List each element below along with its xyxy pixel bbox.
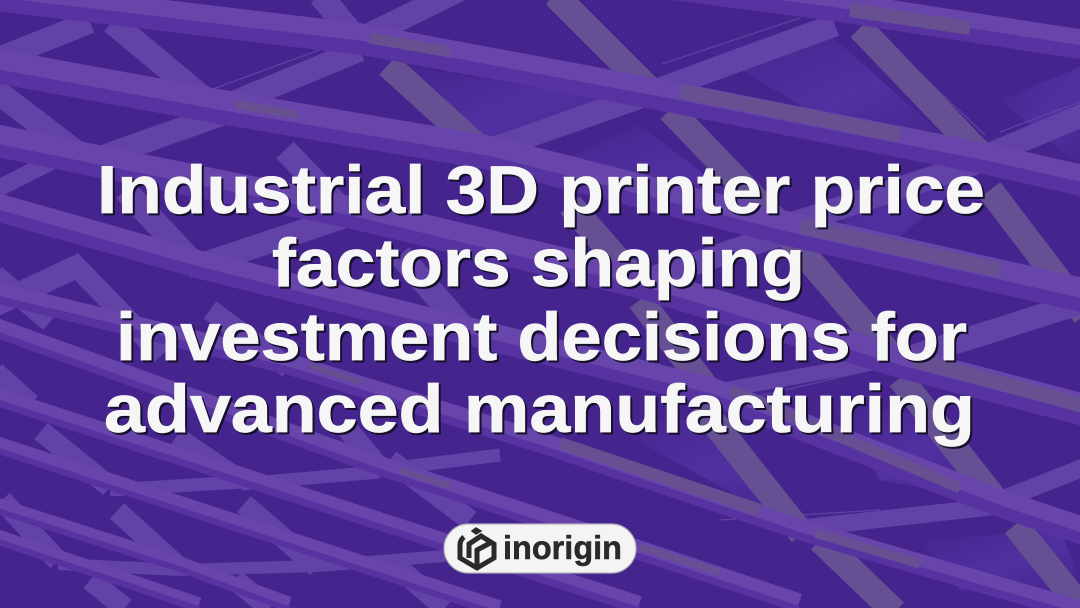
title line 1: Industrial 3D printer price [97,152,985,228]
title line 4: advanced manufacturing [104,371,975,447]
logo icon [460,528,494,568]
logo wordmark: inorigin [503,529,622,566]
logo badge [444,524,636,573]
title line 3: investment decisions for [116,299,967,375]
logo pill [444,524,636,573]
title [97,152,985,447]
left arms: grey [388,0,1080,608]
grey patches on lit faces [235,10,1080,572]
left arms: lit [0,0,470,335]
title line 2: factors shaping [272,225,805,301]
